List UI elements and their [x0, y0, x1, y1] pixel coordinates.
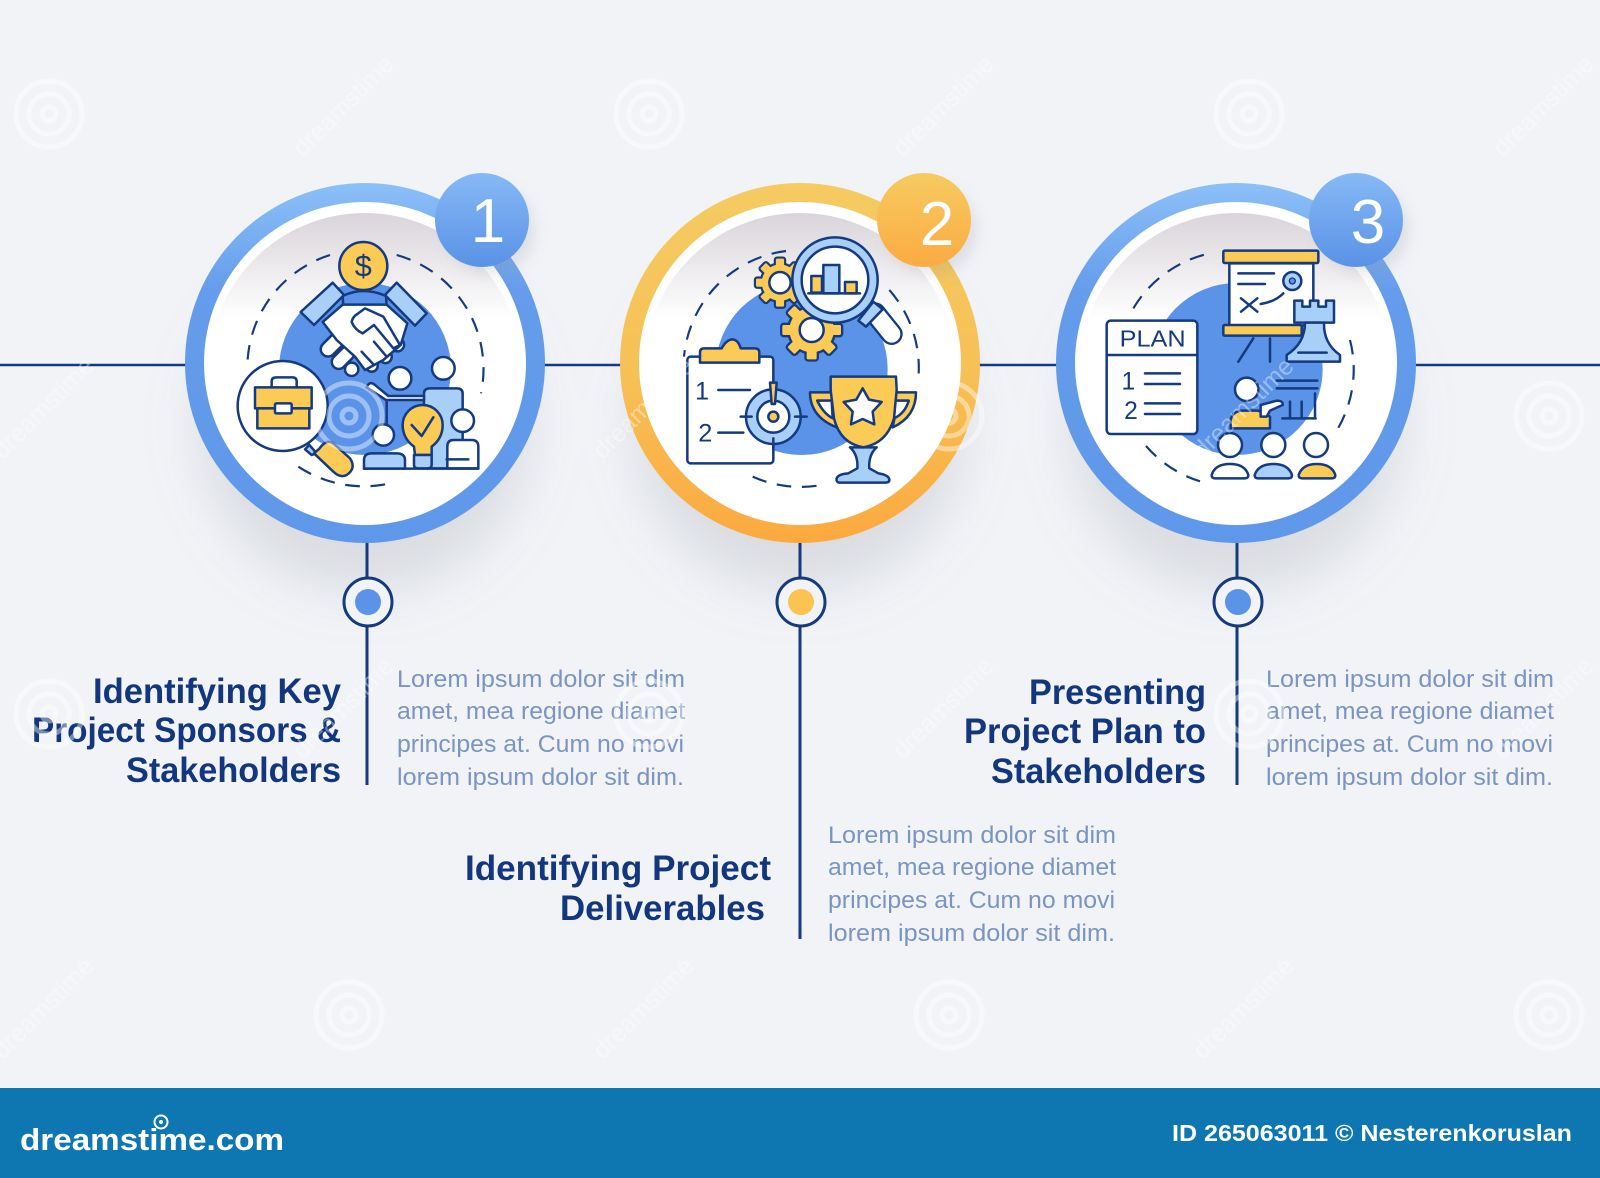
heading: step 1 title: Stakeholders — [126, 751, 341, 790]
text block: step 2 description — [828, 822, 1116, 947]
heading: step 3 title: Project Plan to — [964, 712, 1206, 751]
icon: handshake with sponsors and stakeholders — [238, 242, 484, 486]
icon: project deliverables — [684, 237, 919, 487]
watermark text: dreamstime — [1187, 952, 1299, 1064]
watermark text: dreamstime — [1487, 652, 1599, 764]
footer bar — [0, 1088, 1600, 1178]
icon: handshake with sponsors and stakeholders: $ — [355, 250, 372, 284]
panel: step 2 circle: 2 — [920, 190, 954, 259]
text block: step 2 description: lorem ipsum dolor sit dim. — [828, 920, 1115, 947]
text block: step 1 description: Lorem ipsum dolor sit dim — [397, 666, 685, 693]
heading: step 3 title: Stakeholders — [991, 752, 1206, 791]
panel: step 1 circle — [185, 173, 545, 543]
text block: step 3 description: principes at. Cum no movi — [1266, 731, 1553, 758]
heading: step 2 title: Identifying Project — [465, 849, 771, 888]
watermark text: dreamstime — [287, 50, 399, 162]
heading: step 3 title — [964, 673, 1206, 791]
panel: step 2 circle — [620, 173, 980, 543]
text block: step 2 description: amet, mea regione diamet — [828, 854, 1116, 881]
icon: presenting project plan: 1 — [1121, 368, 1135, 395]
footer credit: ID 265063011 © Nesterenkoruslan — [1172, 1120, 1572, 1146]
step 2 timeline stem — [777, 540, 825, 939]
heading: step 1 title — [32, 672, 342, 790]
text block: step 1 description: principes at. Cum no movi — [397, 731, 684, 758]
panel: step 3 circle — [1056, 173, 1416, 543]
heading: step 3 title: Presenting — [1029, 673, 1206, 712]
circle drop shadows — [200, 260, 1401, 590]
text block: step 3 description: lorem ipsum dolor sit dim. — [1266, 764, 1553, 791]
watermark text: dreamstime — [887, 652, 999, 764]
text block: step 1 description: lorem ipsum dolor sit dim. — [397, 764, 684, 791]
text block: step 1 description — [397, 666, 685, 791]
watermark text: dreamstime — [587, 352, 699, 464]
watermark text: dreamstime — [287, 652, 399, 764]
heading: step 1 title: Identifying Key — [93, 672, 342, 711]
text block: step 2 description: Lorem ipsum dolor sit dim — [828, 822, 1116, 849]
step 3 timeline stem — [1214, 540, 1262, 785]
icon: project deliverables: 2 — [698, 420, 712, 448]
text block: step 2 description: principes at. Cum no movi — [828, 887, 1115, 914]
text block: step 3 description — [1266, 666, 1554, 791]
heading: step 1 title: Project Sponsors & — [32, 711, 341, 750]
watermark text: dreamstime — [587, 952, 699, 1064]
text block: step 1 description: amet, mea regione diamet — [397, 698, 685, 725]
text block: step 3 description: Lorem ipsum dolor sit dim — [1266, 666, 1554, 693]
heading: step 2 title — [465, 849, 771, 928]
icon: project deliverables: 1 — [695, 377, 709, 405]
footer logo: dreamstime.com — [20, 1122, 284, 1157]
text block: step 3 description: amet, mea regione diamet — [1266, 698, 1554, 725]
icon: presenting project plan — [1107, 251, 1354, 482]
heading: step 2 title: Deliverables — [560, 889, 765, 928]
horizontal connector line — [0, 364, 1600, 366]
watermark text: dreamstime — [1187, 352, 1299, 464]
watermark text: dreamstime — [1487, 50, 1599, 162]
icon: presenting project plan: 2 — [1124, 398, 1138, 425]
step 1 timeline stem — [344, 540, 392, 785]
watermark text: dreamstime — [887, 50, 999, 162]
panel: step 1 circle: 1 — [471, 187, 505, 256]
icon: presenting project plan: PLAN — [1120, 326, 1186, 352]
panel: step 3 circle: 3 — [1351, 188, 1385, 257]
